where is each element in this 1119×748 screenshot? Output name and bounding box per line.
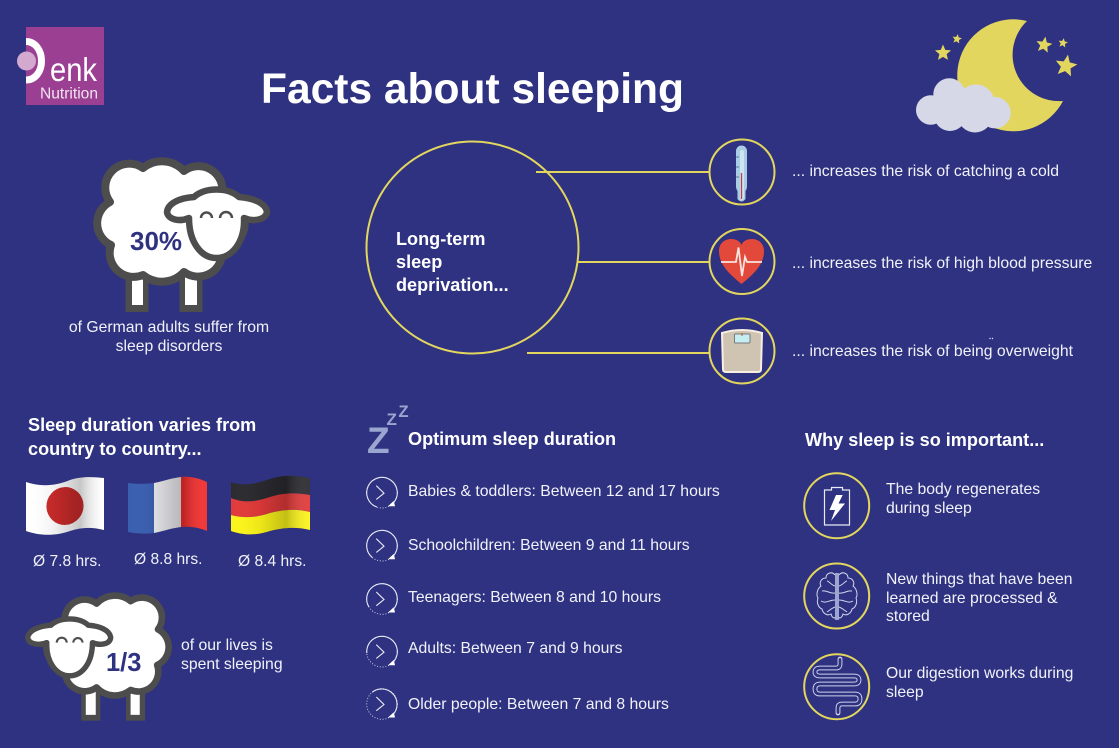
- icon: zzz: Z: [386, 410, 397, 429]
- flag: Germany: [231, 476, 310, 534]
- sheep: 30 percent: 30%: [130, 226, 182, 256]
- text: overweight: ... increases the risk of being overweight: [792, 343, 1074, 360]
- flag: France: [128, 477, 207, 534]
- row: teenagers: [367, 584, 661, 614]
- row: schoolchildren: Schoolchildren: Between 9 and 11 hours: [408, 537, 690, 554]
- icon: thermometer: [710, 140, 774, 204]
- heading: sleep duration by country: Sleep duration varies from: [28, 415, 256, 435]
- row: schoolchildren: [367, 530, 690, 561]
- text: regenerates: [886, 481, 1040, 517]
- text: learning: New things that have been: [886, 571, 1073, 588]
- icon: moon, stars and cloud: [916, 19, 1079, 132]
- icon: zzz: [367, 403, 409, 461]
- icon: zzz: Z: [367, 420, 390, 461]
- logo: enk: [50, 51, 97, 88]
- heading: why sleep is important: Why sleep is so important...: [805, 430, 1044, 450]
- caption: lives spent sleeping: spent sleeping: [181, 656, 283, 673]
- row: adults: [367, 636, 623, 667]
- text: cold: ... increases the risk of catching a cold: [792, 163, 1059, 180]
- flag labels: Ø 8.4 hrs.: [238, 553, 306, 570]
- caption: lives spent sleeping: [181, 637, 283, 673]
- text: digestion: [886, 665, 1073, 701]
- icon: scale: [710, 318, 774, 384]
- hub: long-term sleep deprivation: sleep: [396, 252, 442, 272]
- row: older people: Older people: Between 7 and 8 hours: [408, 696, 669, 713]
- sheep: 30 percent: [97, 161, 267, 312]
- title: Facts about sleeping: [261, 65, 684, 113]
- row: adults: Adults: Between 7 and 9 hours: [408, 640, 623, 657]
- text: digestion: sleep: [886, 684, 924, 701]
- flag: Japan: [26, 477, 104, 535]
- caption: lives spent sleeping: of our lives is: [181, 637, 273, 654]
- flag labels: Ø 7.8 hrs.: [33, 553, 101, 570]
- text: learning: learned are processed &: [886, 590, 1058, 607]
- row: teenagers: Teenagers: Between 8 and 10 hours: [408, 589, 661, 606]
- heading: sleep duration by country: country to country...: [28, 439, 202, 459]
- row: babies: Babies & toddlers: Between 12 and 17 hours: [408, 483, 720, 500]
- flag labels: [33, 551, 306, 570]
- caption: sleep disorders: of German adults suffer from: [69, 319, 269, 336]
- sheep: one third: 1/3: [106, 649, 141, 677]
- text: regenerates: during sleep: [886, 500, 972, 517]
- icon: zzz: Z: [398, 403, 409, 421]
- text: regenerates: The body regenerates: [886, 481, 1040, 498]
- hub: long-term sleep deprivation: deprivation...: [396, 275, 509, 295]
- sheep: one third: [28, 596, 169, 721]
- text: digestion: Our digestion works during: [886, 665, 1073, 682]
- logo: [17, 27, 104, 105]
- logo: Nutrition: [40, 86, 98, 102]
- caption: sleep disorders: sleep disorders: [116, 338, 223, 355]
- text: learning: stored: [886, 608, 930, 625]
- icon: intestine: [804, 654, 869, 719]
- hub: long-term sleep deprivation: Long-term: [396, 229, 485, 249]
- connector lines: [527, 172, 709, 353]
- hub: long-term sleep deprivation: [366, 142, 578, 354]
- row: older people: [367, 689, 669, 719]
- heading: optimum sleep duration: Optimum sleep duration: [408, 429, 616, 449]
- icon: heart: [710, 229, 774, 294]
- row: babies: [367, 477, 720, 508]
- icon: brain: [804, 564, 869, 628]
- heading: sleep duration by country: [28, 415, 256, 459]
- caption: sleep disorders: [69, 319, 269, 355]
- text: learning: [886, 571, 1073, 625]
- text: blood pressure: ... increases the risk of high blood pressure: [792, 255, 1093, 272]
- flag labels: Ø 8.8 hrs.: [134, 551, 202, 568]
- icon: battery: [804, 473, 869, 538]
